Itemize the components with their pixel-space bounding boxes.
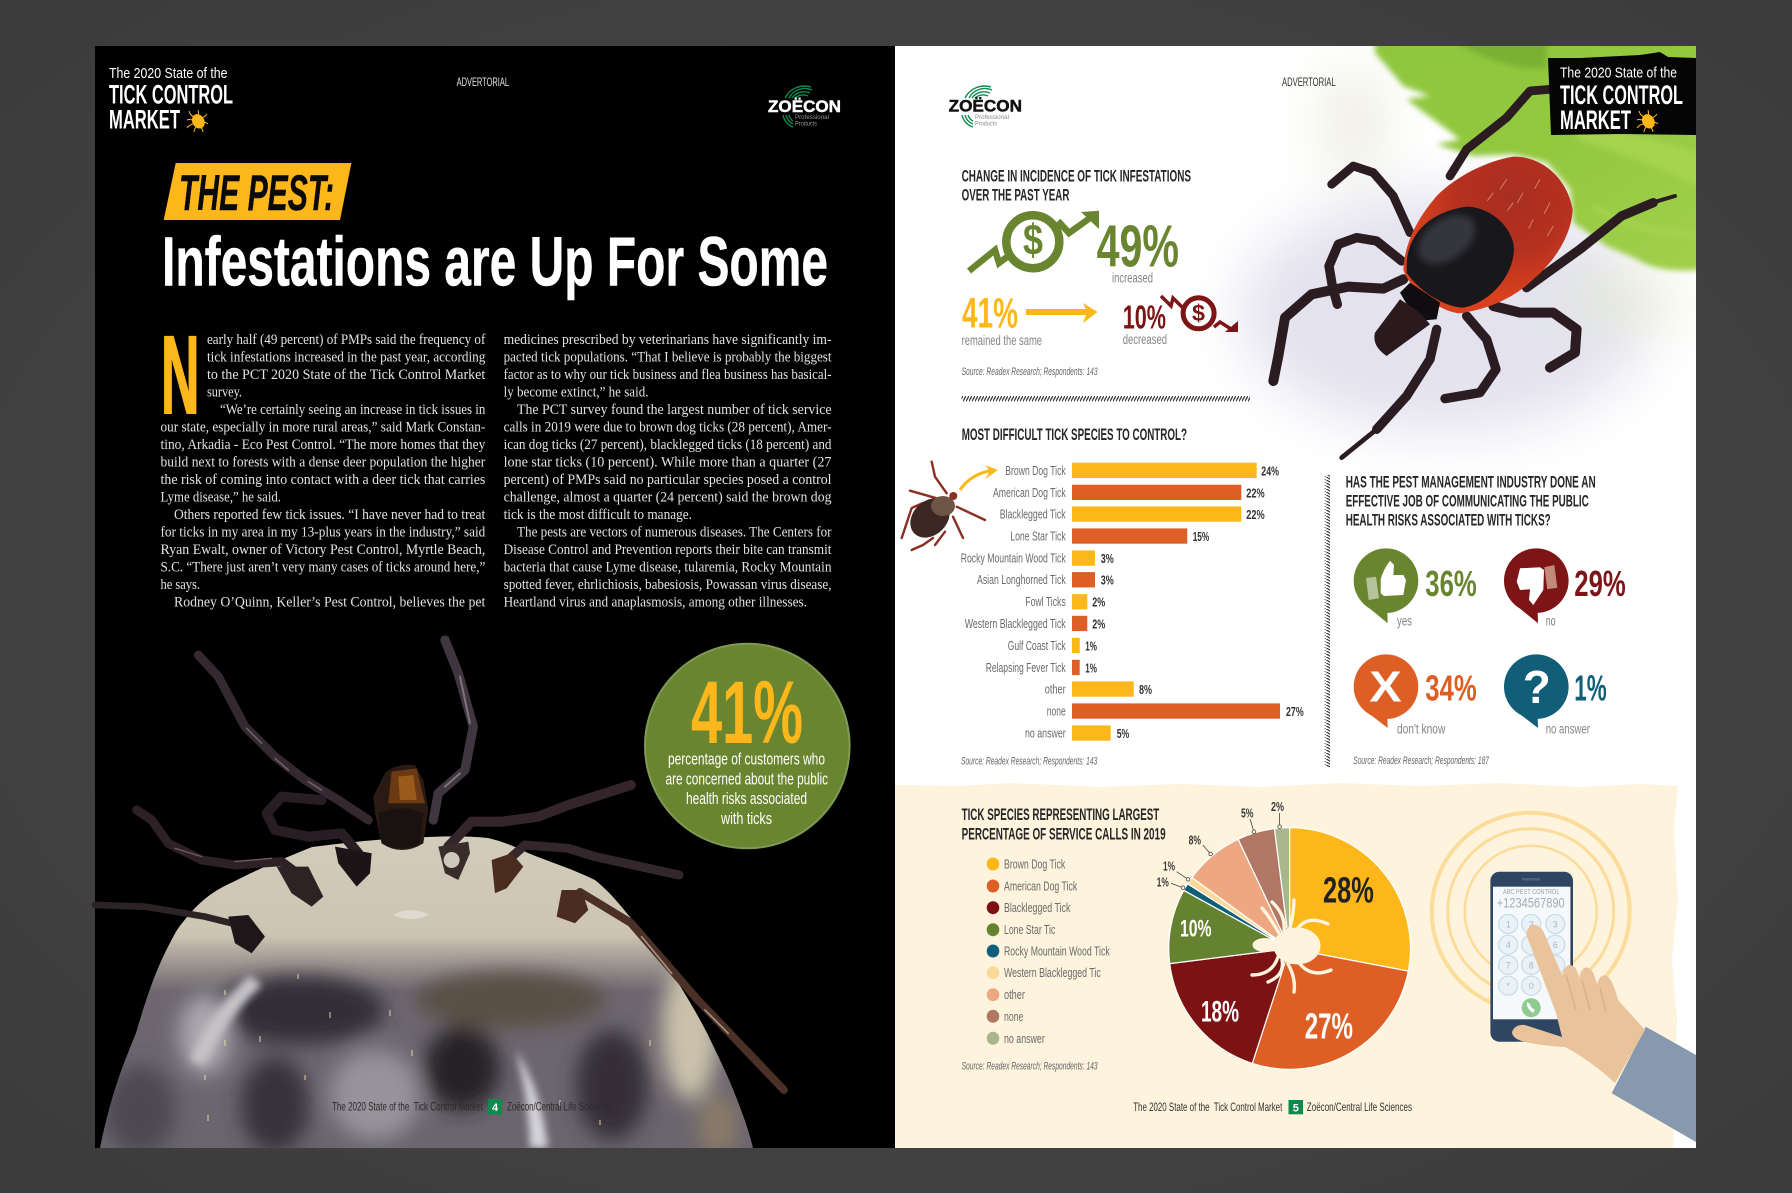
stat: no answer: 1%	[1574, 668, 1607, 709]
legend: Rocky Mountain Wood Tick	[1004, 944, 1110, 958]
article text: column 1: our state, especially in more rural areas,” said Mark Constan-	[160, 419, 485, 435]
pie values: 1%	[1163, 860, 1175, 874]
illustration: phone and hand: 3	[1553, 920, 1558, 930]
illustration: phone and hand: 4	[1506, 940, 1511, 950]
article text: column 2: spotted fever, ehrlichiosis, babesiosis, Powassan virus disease,	[504, 577, 832, 593]
brand badge	[1548, 52, 1696, 135]
callout: 41 percent	[645, 644, 850, 848]
illustration: phone and hand: +1234567890	[1497, 895, 1565, 911]
stat: yes: yes	[1397, 614, 1412, 629]
bar chart: other	[1045, 682, 1066, 697]
icon: gold tick	[187, 110, 208, 132]
illustration: phone and hand: 0	[1529, 981, 1534, 991]
heading: EFFECTIVE JOB OF COMMUNICATING THE PUBLIC	[1346, 493, 1589, 511]
article text: column 2: Heartland virus and anaplasmosis, among other illnesses.	[504, 594, 807, 610]
legend: Lone Star Tic	[1004, 922, 1056, 937]
stat: 10 percent: 10%	[1123, 299, 1166, 336]
stat: no: 29%	[1574, 563, 1626, 604]
illustration: phone and hand: *	[1506, 981, 1510, 991]
stat: no: no	[1546, 614, 1556, 629]
callout: 41 percent: are concerned about the public	[666, 770, 828, 789]
bar chart: 27%	[1286, 705, 1304, 719]
illustration: phone and hand: 1	[1506, 920, 1511, 930]
stat: don't know: don't know	[1397, 721, 1445, 736]
banner: The Pest: THE PEST:	[179, 165, 334, 221]
illustration: phone and hand: 2	[1529, 920, 1534, 930]
footer: left page: 4	[492, 1102, 499, 1114]
article text: column 2: bacteria that cause Lyme disease, tularemia, Rocky Mountain	[504, 559, 832, 575]
legend: no answer	[1004, 1031, 1045, 1046]
bar chart: Asian Longhorned Tick	[977, 572, 1066, 587]
source note: Source: Readex Research; Respondents: 143	[962, 366, 1098, 378]
photo: small brown tick	[902, 462, 985, 550]
legs	[1273, 89, 1675, 458]
article text: column 2	[504, 332, 832, 610]
article text: column 2: medicines prescribed by veterinarians have significantly im-	[504, 332, 832, 348]
heading: CHANGE IN INCIDENCE OF TICK INFESTATIONS	[962, 167, 1191, 185]
icon: question bubble: ?	[1523, 661, 1551, 713]
banner: The Pest	[164, 163, 351, 221]
bar chart: 2%	[1092, 617, 1105, 631]
pie chart	[1157, 800, 1410, 1069]
leaf	[1375, 36, 1707, 271]
brand badge: MARKET	[1560, 105, 1631, 135]
icon: dollar with rising arrow	[969, 211, 1099, 271]
logo: Zoecon: Products	[975, 122, 997, 128]
source note: Source: Readex Research; Respondents: 187	[1353, 755, 1490, 767]
brand block: The 2020 State of the Tick Control Market: The 2020 State of the	[109, 65, 228, 82]
stat: don't know: 34%	[1425, 668, 1477, 709]
pie values	[1157, 800, 1374, 1046]
callout: 41 percent: with ticks	[720, 809, 772, 828]
panel: change in incidence	[962, 167, 1238, 378]
stat: 10 percent	[1123, 305, 1166, 344]
label: advertorial: ADVERTORIAL	[457, 75, 509, 89]
bar chart: 3%	[1101, 574, 1114, 588]
illustration: phone and hand: 8	[1529, 960, 1534, 970]
article text: column 2: factor as to why our tick business and flea business has basical-	[504, 367, 832, 383]
article text: column 1: the risk of coming into contact with a deer tick that carries	[160, 472, 486, 488]
pie values: 27%	[1305, 1005, 1353, 1046]
stat: yes	[1397, 570, 1476, 628]
article text: column 2: lone star ticks (10 percent). While more than a quarter (27	[504, 454, 832, 470]
stat: 41 percent: remained the same	[962, 333, 1042, 348]
soft surface shading	[1240, 66, 1693, 433]
arrow: to brown dog tick	[960, 465, 998, 490]
article text: column 1: for ticks in my area in my 13-plus years in the industry,” said	[160, 524, 486, 540]
callout: 41 percent: 41%	[691, 662, 803, 762]
label: advertorial: ADVERTORIAL	[1282, 75, 1336, 89]
heading: HAS THE PEST MANAGEMENT INDUSTRY DONE AN	[1346, 473, 1596, 491]
logo: Zoecon: Professional	[795, 115, 829, 121]
stat: 49 percent: 49%	[1097, 214, 1179, 280]
logo: Zoecon: ZOËCON	[949, 97, 1022, 116]
article text: column 2: calls in 2019 were due to brown dog ticks (28 percent), Amer-	[504, 419, 832, 435]
source note: Source: Readex Research; Respondents: 143	[962, 1060, 1098, 1072]
source note: Source: Readex Research; Respondents: 143	[961, 755, 1098, 767]
stat: no	[1546, 570, 1626, 626]
article text: column 2: The pests are vectors of numerous diseases. The Centers for	[517, 524, 832, 540]
panel: left page	[90, 46, 895, 1157]
bar chart: 1%	[1085, 661, 1097, 675]
stat: don't know	[1397, 675, 1476, 734]
legend: Blacklegged Tick	[1004, 900, 1071, 915]
article text: column 1: tino, Arkadia - Eco Pest Control. “The more homes that they	[160, 437, 486, 453]
legend: none	[1004, 1009, 1023, 1024]
icon: thumbs up bubble	[1354, 548, 1418, 623]
article text: column 2: pacted tick populations. “That I believe is probably the biggest	[504, 349, 832, 365]
bar chart: none	[1047, 704, 1066, 719]
article text: column 1: Rodney O’Quinn, Keller’s Pest Control, believes the pet	[174, 594, 485, 610]
article text: column 1: he says.	[160, 577, 200, 593]
stat: no answer	[1546, 675, 1606, 734]
bar chart: 15%	[1193, 530, 1209, 544]
article text: column 2: Disease Control and Prevention reports their bite can transmit	[504, 542, 832, 558]
bar chart: Brown Dog Tick	[1005, 463, 1066, 478]
photo: red tick on leaf	[1240, 36, 1707, 458]
icon: dollar with falling arrow: $	[1192, 300, 1205, 326]
illustration: phone and hand: ABC PEST CONTROL	[1503, 889, 1560, 896]
panel: communicating health risks	[1346, 473, 1626, 767]
article text: column 2: challenge, almost a quarter (24 percent) said the brown dog	[504, 489, 832, 505]
bar chart: 3%	[1101, 552, 1114, 566]
callout: 41 percent: health risks associated	[686, 789, 807, 808]
bar chart	[961, 463, 1304, 741]
article text: column 2: The PCT survey found the largest number of tick service	[517, 402, 832, 418]
callout: 41 percent: percentage of customers who	[668, 750, 825, 769]
bar chart: 24%	[1261, 464, 1279, 478]
pie values: 28%	[1323, 870, 1374, 911]
icon: X bubble	[1354, 654, 1418, 728]
stat: 41 percent: 41%	[962, 290, 1018, 338]
bar chart: 2%	[1092, 596, 1105, 610]
icon: dollar with rising arrow: $	[1023, 216, 1043, 265]
brand block: The 2020 State of the Tick Control Market	[109, 65, 233, 135]
icon: X bubble: X	[1369, 663, 1402, 712]
bar chart: no answer	[1025, 726, 1066, 741]
footer: left page: The 2020 State of the Tick Control Market	[332, 1100, 483, 1114]
brand badge: The 2020 State of the	[1560, 65, 1677, 82]
heading	[1346, 476, 1596, 526]
brand block: The 2020 State of the Tick Control Market: TICK CONTROL	[109, 80, 233, 110]
pie values: 2%	[1271, 800, 1284, 814]
pie values: 8%	[1189, 833, 1201, 847]
pie leader lines	[1171, 813, 1281, 890]
legend: Brown Dog Tick	[1004, 856, 1066, 872]
stat: no answer: no answer	[1546, 721, 1590, 736]
icon: dollar with falling arrow	[1161, 296, 1238, 332]
illustration: phone and hand	[1432, 813, 1696, 1142]
article text: column 2: percent) of PMPs said no particular species posed a control	[504, 472, 832, 488]
article text: column 2: ican dog ticks (27 percent), blacklegged ticks (18 percent) and	[504, 437, 832, 453]
footer: right page: Zoëcon/Central Life Sciences	[1307, 1100, 1412, 1114]
article text: column 1	[160, 332, 486, 610]
panel: right page	[895, 36, 1707, 1148]
heading: TICK SPECIES REPRESENTING LARGEST	[962, 806, 1159, 824]
brand badge: TICK CONTROL	[1560, 80, 1683, 110]
icon: thumbs down bubble	[1504, 548, 1569, 623]
bar chart: 1%	[1085, 639, 1097, 653]
logo: Zoecon: Products	[795, 122, 817, 128]
tick legs and head	[95, 640, 784, 1090]
article text: column 1: tick infestations increased in the past year, according	[207, 349, 485, 365]
article text: column 1: Lyme disease,” he said.	[160, 489, 281, 505]
icon: gold tick	[1637, 110, 1658, 132]
tick body	[1403, 157, 1573, 313]
logo: Zoecon: ZOËCON	[768, 97, 841, 116]
illustration: phone and hand: 6	[1553, 940, 1558, 950]
icon: tick silhouette	[1252, 900, 1331, 992]
photo: engorged tick from below	[90, 640, 784, 1157]
illustration: phone and hand: 7	[1506, 960, 1511, 970]
heading	[962, 170, 1191, 200]
bar chart: Gulf Coast Tick	[1008, 638, 1066, 653]
footer: right page: 5	[1293, 1102, 1299, 1114]
stat: 10 percent: decreased	[1123, 332, 1167, 347]
bar chart: Fowl Ticks	[1025, 594, 1066, 609]
pie values: 10%	[1180, 916, 1212, 943]
stat: 41 percent	[962, 298, 1042, 345]
heading: OVER THE PAST YEAR	[962, 187, 1069, 205]
bar chart: 5%	[1117, 727, 1129, 741]
article text: column 1: Ryan Ewalt, owner of Victory Pest Control, Myrtle Beach,	[160, 542, 485, 558]
panel: most difficult species	[902, 426, 1304, 767]
article text: column 1: to the PCT 2020 State of the Tick Control Market	[207, 367, 485, 383]
panel: service calls	[895, 783, 1696, 1148]
stat: 49 percent: increased	[1112, 271, 1153, 286]
logo: Zoecon	[949, 86, 1022, 128]
heading: MOST DIFFICULT TICK SPECIES TO CONTROL?	[962, 426, 1187, 444]
bar chart: Relapsing Fever Tick	[986, 660, 1066, 675]
footer: right page: The 2020 State of the Tick Control Market	[1133, 1100, 1283, 1114]
bar chart: 22%	[1246, 486, 1265, 500]
legend: Western Blacklegged Tic	[1004, 965, 1101, 980]
heading	[962, 806, 1166, 843]
article text: column 1: early half (49 percent) of PMPs said the frequency of	[207, 332, 485, 348]
article text: column 1: build next to forests with a dense deer population the higher	[160, 454, 485, 470]
pie values: 18%	[1201, 996, 1239, 1029]
heading: PERCENTAGE OF SERVICE CALLS IN 2019	[962, 825, 1166, 843]
bar chart: Lone Star Tick	[1010, 529, 1066, 544]
pie values: 5%	[1241, 806, 1254, 820]
article text: column 1: S.C. “There just aren’t very many cases of ticks around here,”	[160, 559, 485, 575]
article text: column 1: “We’re certainly seeing an increase in tick issues in	[220, 402, 486, 418]
hand	[1512, 925, 1645, 1083]
stat: 49 percent	[1097, 225, 1178, 282]
footer: left page: Zoëcon/Central Life Sciences	[507, 1100, 611, 1114]
bar chart: Blacklegged Tick	[1000, 507, 1066, 522]
panel: left page: N	[161, 314, 200, 437]
sleeve	[1612, 1027, 1696, 1142]
legend	[987, 856, 1110, 1046]
bar chart: 22%	[1246, 508, 1265, 522]
logo: Zoecon: Professional	[975, 115, 1009, 121]
bar chart: 8%	[1139, 683, 1152, 697]
article text: column 2: tick is the most difficult to manage.	[504, 507, 692, 523]
stat: yes: 36%	[1425, 563, 1477, 604]
pie values: 1%	[1157, 876, 1169, 890]
legend: other	[1004, 987, 1025, 1002]
bar chart: Western Blacklegged Tick	[965, 616, 1066, 631]
logo: Zoecon	[768, 86, 841, 128]
article text: column 1: Others reported few tick issues. “I have never had to treat	[174, 507, 485, 523]
legend: American Dog Tick	[1004, 878, 1078, 894]
title: Infestations are Up For Some	[162, 223, 828, 301]
icon: question bubble	[1504, 654, 1569, 728]
arrow: flat	[1026, 303, 1098, 323]
article text: column 1: survey.	[207, 384, 242, 400]
bar chart: American Dog Tick	[993, 485, 1066, 500]
article text: column 2: ly become extinct,” he said.	[504, 384, 648, 400]
bar chart: Rocky Mountain Wood Tick	[961, 551, 1066, 566]
heading: HEALTH RISKS ASSOCIATED WITH TICKS?	[1346, 512, 1551, 530]
brand block: The 2020 State of the Tick Control Market: MARKET	[109, 105, 180, 135]
